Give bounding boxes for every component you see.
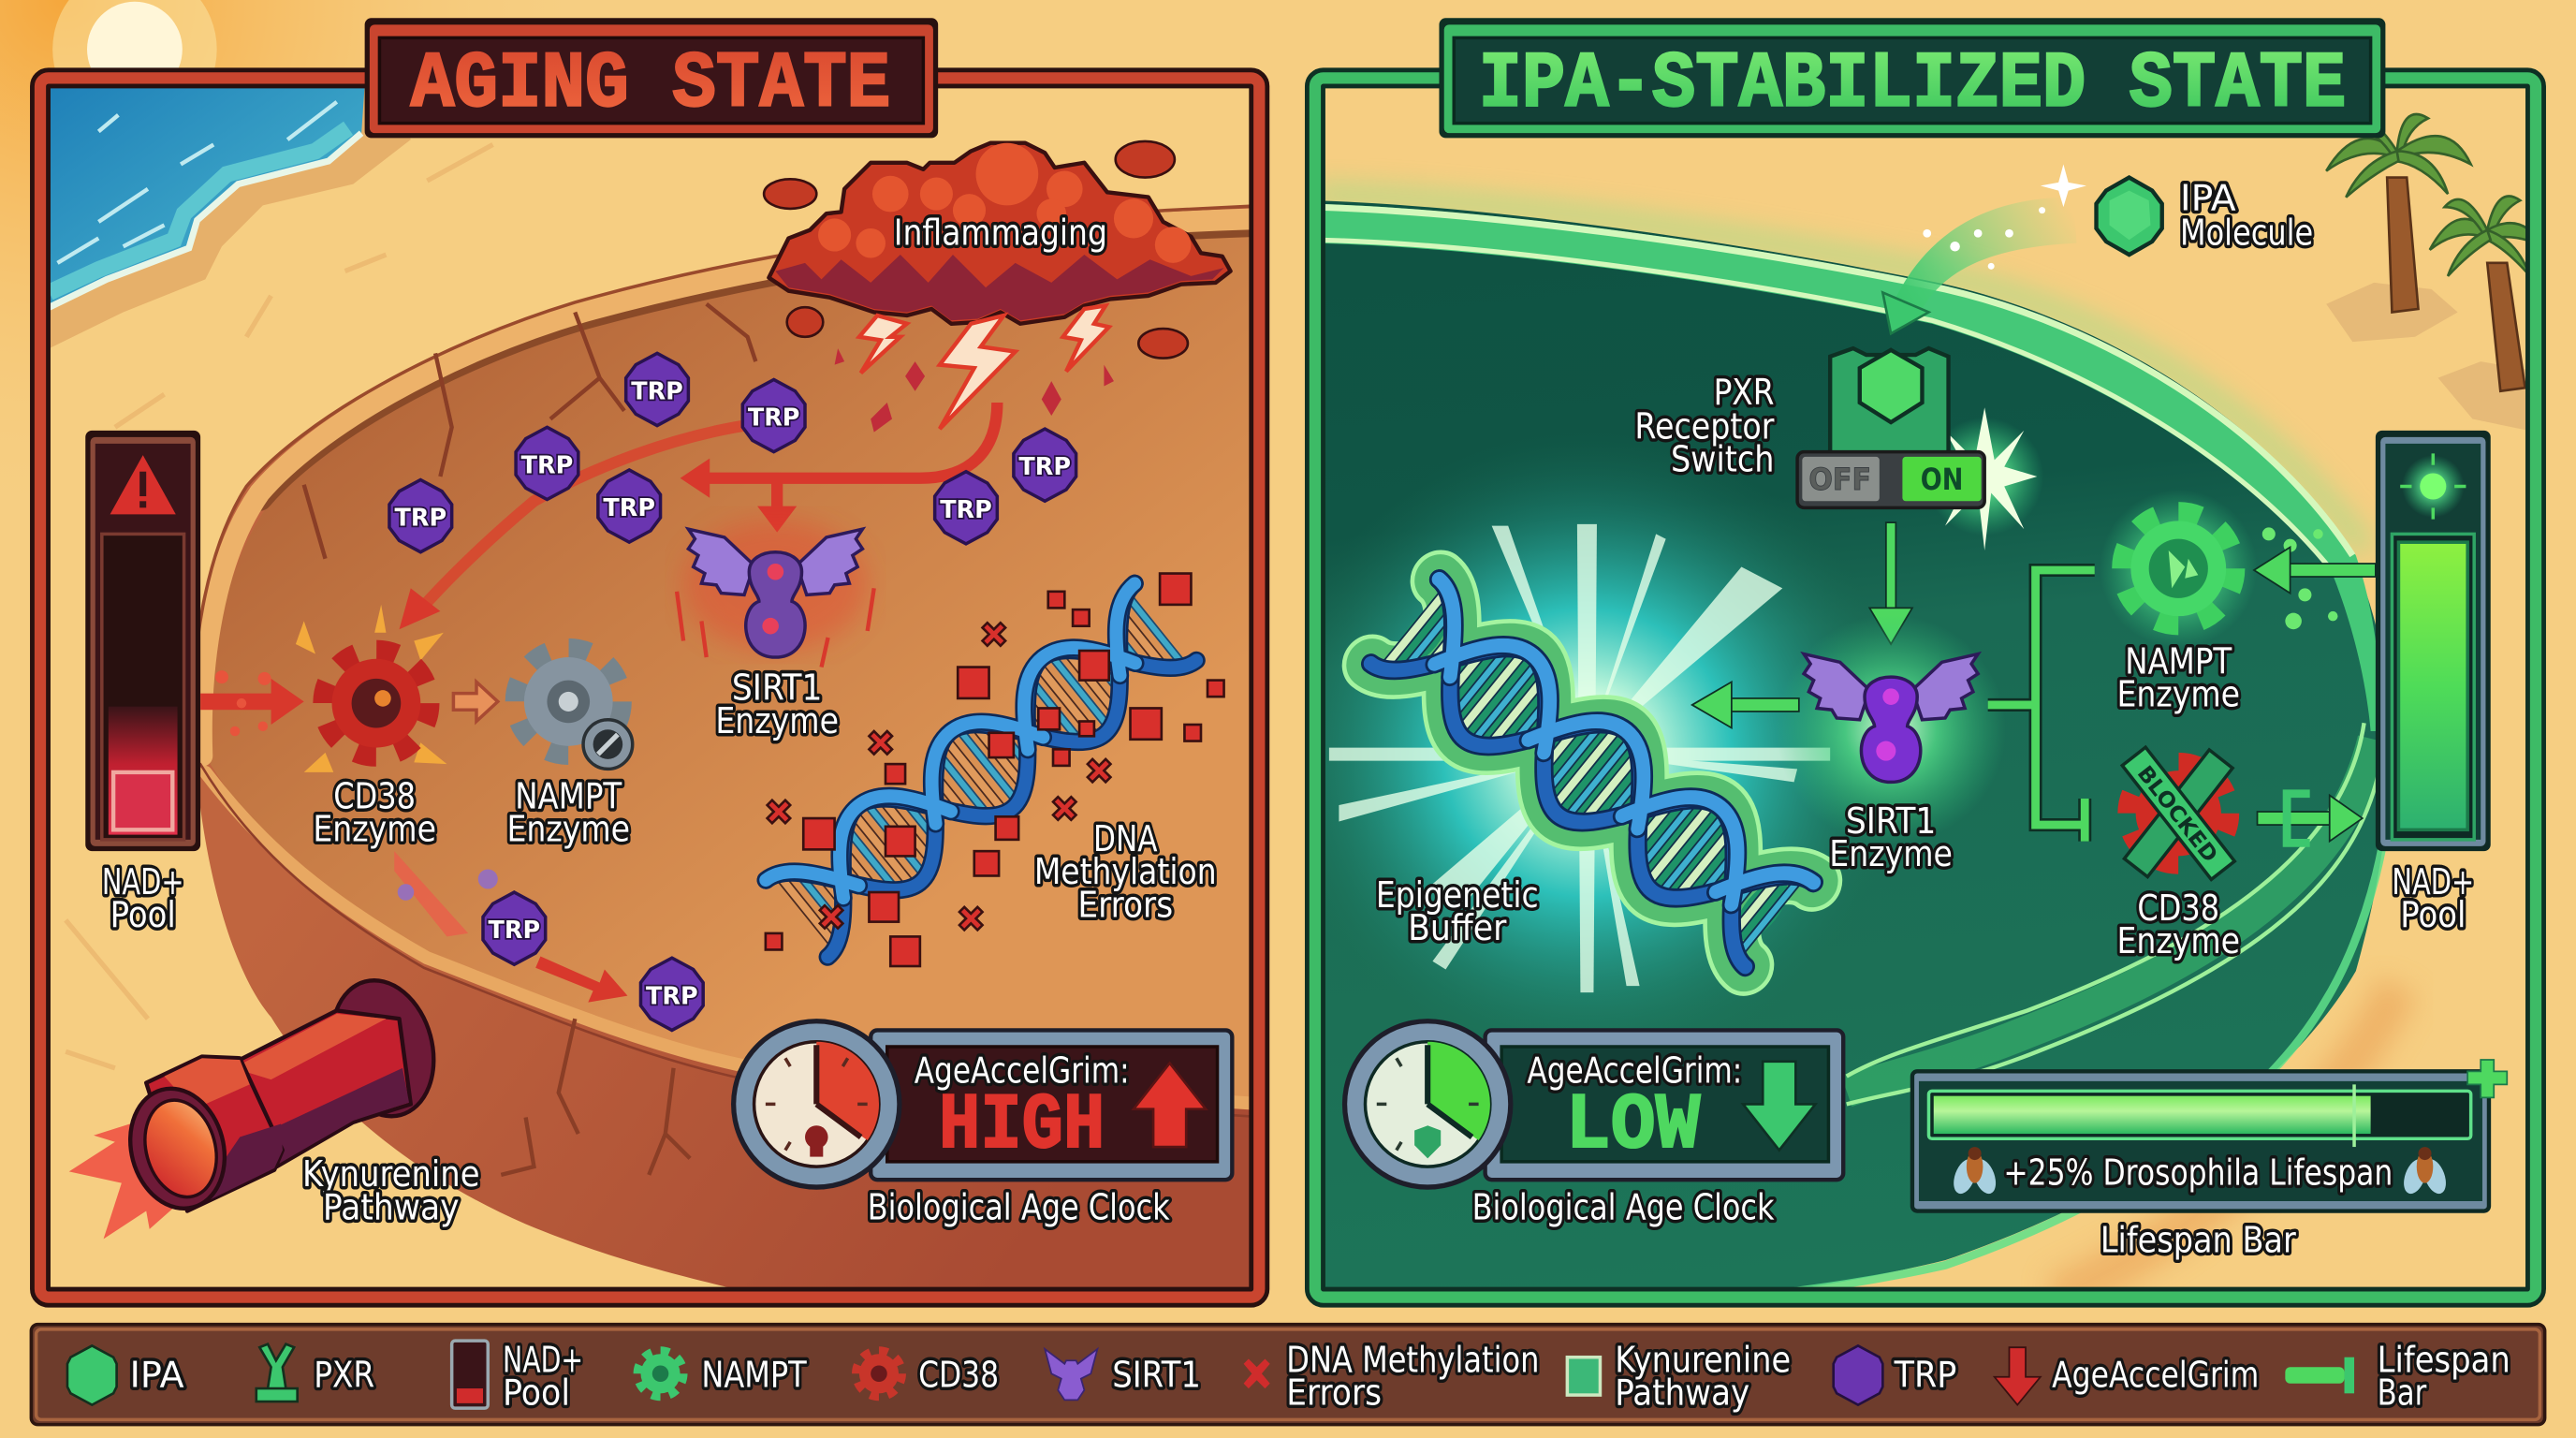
label: SIRT1 enzyme — [715, 668, 839, 742]
legend item: NAMPT — [639, 1352, 807, 1396]
label: PXR receptor switch: Receptor — [1634, 406, 1775, 448]
pipe body — [230, 1010, 411, 1170]
pool upper band — [1314, 204, 2382, 731]
chart: left panel frame — [40, 78, 1259, 1298]
chart: right panel frame — [1315, 78, 2536, 1298]
burst rays — [1329, 524, 1830, 992]
panel: high age clock — [731, 1019, 1232, 1190]
arrow: NAD+ to NAMPT — [2254, 547, 2376, 594]
legend item: kynurenine pathway: Kynurenine — [1615, 1340, 1791, 1382]
arrow: up — [1134, 1064, 1206, 1147]
arrow: blocked CD38 to NAD+ — [2258, 794, 2363, 843]
label: PXR receptor switch: PXR — [1714, 372, 1775, 414]
label: inflammaging: Inflammaging — [894, 213, 1107, 255]
legend item: AgeAccelGrim: AgeAccelGrim — [2052, 1354, 2259, 1396]
label: CD38 enzyme: CD38 — [333, 776, 416, 818]
label: SIRT1 enzyme: Enzyme — [715, 700, 839, 742]
legend item: NAD+ pool: Pool — [503, 1372, 570, 1415]
TRP molecules: TRP — [940, 495, 992, 523]
label: right SIRT1 enzyme — [1829, 800, 1953, 875]
icon: IPA molecule — [2097, 178, 2162, 255]
label: right SIRT1 enzyme: SIRT1 — [1846, 800, 1936, 843]
sand ripples — [66, 144, 493, 1068]
palm trees — [2326, 114, 2543, 431]
label: left NAD+ pool: NAD+ — [102, 861, 184, 903]
icon: NAMPT gear disabled — [518, 651, 633, 769]
icon: PXR receptor switch — [1797, 348, 2043, 550]
label: CD38 enzyme — [313, 776, 436, 851]
TRP molecules: TRP — [489, 916, 540, 944]
legend item: lifespan bar: Lifespan — [2378, 1340, 2510, 1382]
cloud fragments — [764, 141, 1188, 359]
lifespan meter — [1928, 1084, 2471, 1147]
label: DNA methylation errors: Methylation — [1034, 851, 1217, 893]
label: epigenetic buffer — [1376, 874, 1539, 949]
arrow: IPA trail to PXR — [1882, 165, 2086, 333]
pool floor — [1314, 200, 2391, 1299]
label: PXR receptor switch: Switch — [1671, 439, 1775, 481]
label: IPA molecule: Molecule — [2180, 213, 2313, 255]
legend item: PXR: PXR — [314, 1354, 374, 1396]
palm crowns — [2326, 114, 2543, 276]
title: aging state — [365, 18, 938, 138]
label: kynurenine pathway: Pathway — [323, 1186, 460, 1228]
legend item: DNA methylation errors — [1244, 1340, 1540, 1415]
icon: plus — [2467, 1060, 2507, 1097]
flange — [317, 969, 448, 1128]
label: CD38 enzyme: Enzyme — [313, 809, 436, 851]
icon: CD38 gear blocked: BLOCKED — [2132, 761, 2222, 867]
label: right CD38 enzyme — [2116, 888, 2240, 962]
arrow: PXR to SIRT1 — [1869, 522, 1912, 644]
legend item: DNA methylation errors: Errors — [1286, 1372, 1382, 1415]
basin wall — [193, 205, 1265, 1299]
label: NAMPT enzyme: NAMPT — [515, 776, 622, 818]
sky glow — [0, 0, 822, 542]
central burst glow — [1325, 470, 1846, 1020]
top band soft glow — [1314, 194, 2365, 550]
arrow: NAD+ to CD38 — [200, 679, 304, 725]
TRP molecules: TRP — [603, 493, 655, 521]
helix core glow — [1381, 589, 1804, 957]
pipe collar — [146, 1057, 283, 1211]
label: left NAD+ pool — [102, 861, 184, 936]
label: AgeAccelGrim low: AgeAccelGrim: — [1527, 1050, 1742, 1093]
legend item: IPA: IPA — [130, 1354, 184, 1396]
legend item: NAD+ pool: NAD+ — [503, 1340, 583, 1382]
icon: CD38 gear blocked — [2122, 747, 2234, 879]
icon: kynurenine pipe — [69, 969, 448, 1239]
icon: right DNA with epigenetic buffer — [1370, 579, 1814, 967]
legend item: TRP — [1834, 1345, 1956, 1405]
label: DNA methylation errors: DNA — [1093, 818, 1158, 860]
panel: low age clock — [1342, 1019, 1843, 1190]
legend item: PXR — [256, 1344, 374, 1401]
legend item: lifespan bar: Bar — [2378, 1372, 2426, 1415]
label: epigenetic buffer: Epigenetic — [1376, 874, 1539, 917]
value: LOW: LOW — [1566, 1082, 1701, 1171]
panel: lifespan bar — [1912, 1060, 2507, 1211]
label: SIRT1 enzyme: SIRT1 — [732, 668, 822, 710]
label: NAMPT enzyme — [506, 776, 630, 851]
icon: PXR receptor switch: OFF — [1808, 463, 1871, 497]
label: kynurenine pathway: Kynurenine — [302, 1153, 479, 1196]
icon: SIRT1 enzyme stressed — [677, 520, 874, 668]
label: drosophila lifespan: +25% Drosophila Lifespan — [2003, 1152, 2393, 1194]
label: PXR receptor switch — [1634, 372, 1775, 481]
label: right biological age clock: Biological Age Clock — [1472, 1186, 1775, 1228]
methylation error markers — [766, 574, 1224, 966]
label: epigenetic buffer: Buffer — [1408, 907, 1507, 949]
TRP molecules: TRP — [646, 981, 698, 1009]
icon: SIRT1 enzyme active — [1776, 614, 2006, 844]
panel: aging state scene — [50, 85, 1265, 1299]
legend item: TRP: TRP — [1894, 1354, 1956, 1396]
arrow: CD38 to NAMPT — [453, 682, 498, 721]
label: left NAD+ pool: Pool — [110, 894, 176, 936]
arrow: TRP stream to CD38 — [399, 424, 755, 629]
pipe mouth — [117, 1078, 238, 1219]
palm trunks — [2387, 178, 2419, 312]
gauge: left NAD+ pool — [85, 431, 200, 851]
legend item: AgeAccelGrim — [1995, 1347, 2259, 1405]
title: IPA stabilized state: IPA-STABILIZED STATE — [1479, 40, 2346, 129]
legend item: NAMPT: NAMPT — [701, 1354, 807, 1396]
TRP molecules — [389, 353, 1076, 1030]
TRP molecules: TRP — [395, 504, 446, 532]
label: right NAD+ pool: NAD+ — [2392, 861, 2474, 903]
legend item: lifespan bar — [2285, 1340, 2510, 1415]
label: NAMPT enzyme: Enzyme — [506, 809, 630, 851]
pool inner glow line — [1847, 723, 2385, 1104]
cloud highlights — [818, 143, 1191, 263]
label: right SIRT1 enzyme: Enzyme — [1829, 833, 1953, 875]
label: IPA molecule — [2180, 178, 2313, 255]
value: HIGH: HIGH — [939, 1082, 1105, 1171]
legend item: SIRT1 — [1045, 1349, 1201, 1400]
icon: clock with shield — [1342, 1019, 1513, 1190]
label: DNA methylation errors — [1034, 818, 1217, 926]
label: left biological age clock: Biological Age Clock — [868, 1186, 1170, 1228]
label: AgeAccelGrim: AgeAccelGrim: — [915, 1050, 1130, 1093]
title: IPA stabilized state — [1439, 18, 2385, 138]
label: right CD38 enzyme: CD38 — [2137, 888, 2219, 930]
icon: green status light — [2400, 453, 2466, 520]
pool lower wall band — [1847, 740, 2374, 1091]
arrow: SIRT1 to DNA — [1692, 682, 1799, 728]
arrow: fading streak and TRP diversion — [394, 851, 627, 1003]
cloud: inflammaging — [764, 141, 1231, 359]
legend item: kynurenine pathway: Pathway — [1615, 1372, 1749, 1415]
legend item: DNA methylation errors: DNA Methylation — [1286, 1340, 1540, 1382]
label: lifespan bar: Lifespan Bar — [2100, 1219, 2296, 1261]
basin floor — [210, 230, 1265, 1101]
palm shadows — [2326, 283, 2458, 342]
panel: IPA stabilized scene — [1266, 85, 2543, 1299]
legend — [31, 1325, 2545, 1425]
label: right NAMPT enzyme: NAMPT — [2125, 641, 2232, 683]
icon: lightning bolts — [859, 305, 1109, 429]
gauge: right NAD+ pool — [2376, 431, 2491, 851]
label: IPA molecule: IPA — [2180, 178, 2236, 220]
TRP molecules: TRP — [631, 376, 683, 404]
label: right NAMPT enzyme — [2116, 641, 2240, 716]
icon: warning triangle — [110, 455, 176, 514]
label: kynurenine pathway — [302, 1153, 479, 1228]
label: right NAD+ pool — [2392, 861, 2474, 936]
arrow: down — [1743, 1062, 1815, 1151]
TRP molecules: TRP — [1018, 452, 1071, 480]
icon: clock with skull — [731, 1019, 902, 1190]
label: right CD38 enzyme: Enzyme — [2116, 920, 2240, 962]
water and shoreline — [50, 85, 411, 348]
flame — [69, 1123, 178, 1239]
icon: sun — [52, 0, 217, 131]
TRP molecules: TRP — [748, 404, 799, 432]
buffer halo — [1370, 579, 1814, 967]
legend item: IPA — [67, 1345, 184, 1405]
label: DNA methylation errors: Errors — [1077, 884, 1173, 926]
legend item: kynurenine pathway — [1567, 1340, 1791, 1415]
legend item: SIRT1: SIRT1 — [1112, 1354, 1201, 1396]
lower right sand shading — [2054, 986, 2398, 1299]
chart: damaged DNA helix — [766, 583, 1196, 957]
label: right NAMPT enzyme: Enzyme — [2116, 674, 2240, 716]
basin rim — [193, 205, 1265, 1117]
sparks and droplets — [835, 348, 1114, 433]
legend item: CD38: CD38 — [918, 1354, 999, 1396]
legend item: CD38 — [857, 1352, 999, 1396]
rim cracks — [304, 304, 755, 1175]
icon: PXR receptor switch: ON — [1921, 463, 1963, 497]
cloud underside — [775, 255, 1224, 320]
label: right NAD+ pool: Pool — [2400, 894, 2466, 936]
icon: CD38 gear — [215, 605, 446, 772]
pool outer glow — [1795, 849, 2385, 1287]
icon: NAMPT gear active — [2100, 490, 2338, 648]
legend item: NAD+ pool — [452, 1340, 583, 1415]
TRP molecules: TRP — [521, 450, 573, 478]
pool upper glow lines — [1314, 207, 2352, 572]
connector: SIRT1 bracket to NAMPT and CD38 — [1988, 570, 2095, 842]
arrow: inflammaging to SIRT1 — [681, 403, 997, 533]
title: aging state: AGING STATE — [411, 40, 890, 129]
icon: flies — [1950, 1147, 2451, 1196]
